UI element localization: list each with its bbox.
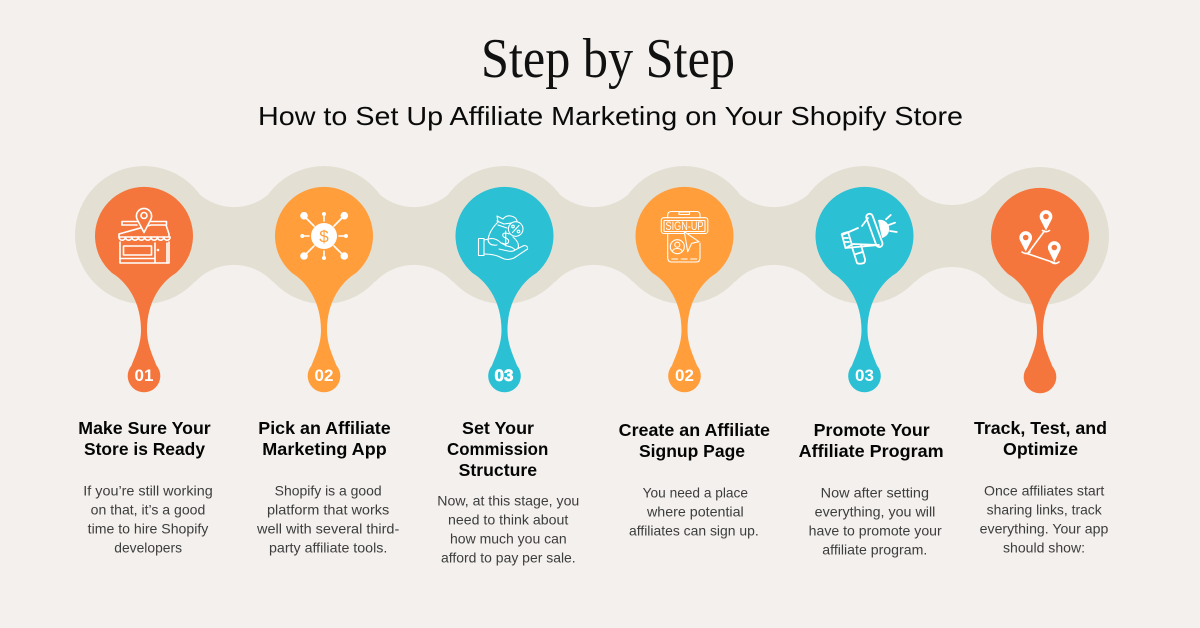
heading <box>258 418 391 459</box>
step 2 <box>256 187 399 556</box>
icon: sign-up phone <box>661 212 708 262</box>
drop marker <box>275 187 373 392</box>
subtitle: How to Set Up Affiliate Marketing on Your Shopify Store <box>258 101 963 131</box>
description: If you’re still working <box>83 484 213 499</box>
step 1 <box>78 187 213 556</box>
heading: Promote Your <box>814 420 930 440</box>
icon: megaphone <box>842 213 897 264</box>
description: Now, at this stage, you <box>437 494 579 509</box>
drop marker <box>816 187 914 392</box>
description: time to hire Shopify <box>88 522 209 537</box>
icon: sign-up phone: SIGN-UP <box>666 221 704 233</box>
icon: dollar network: $ <box>319 227 329 246</box>
description: sharing links, track <box>987 503 1102 518</box>
drop marker <box>456 187 554 392</box>
description: everything. Your app <box>980 522 1108 537</box>
description: affiliates can sign up. <box>629 524 759 539</box>
heading <box>974 418 1107 459</box>
heading <box>447 418 548 480</box>
heading: Store is Ready <box>84 439 205 459</box>
icon: dollar network <box>300 212 348 260</box>
number: 01 <box>135 366 153 385</box>
description <box>629 486 759 539</box>
step 4 <box>619 187 770 539</box>
drop marker <box>636 187 734 392</box>
heading <box>78 418 211 459</box>
description: platform that works <box>267 503 390 518</box>
heading: Pick an Affiliate <box>258 418 391 438</box>
heading: Commission <box>447 439 548 459</box>
beige connecting band <box>75 166 1109 305</box>
icon: storefront with pin <box>119 208 170 263</box>
description: Once affiliates start <box>984 484 1105 499</box>
drop marker <box>95 187 193 392</box>
description <box>980 484 1108 556</box>
icon: hand holding money bag <box>478 216 528 260</box>
description: Shopify is a good <box>275 484 382 499</box>
description: should show: <box>1003 541 1085 556</box>
heading: Set Your <box>462 418 534 438</box>
heading: Create an Affiliate <box>619 420 770 440</box>
heading: Optimize <box>1003 439 1078 459</box>
description: well with several third- <box>256 522 399 537</box>
heading: Make Sure Your <box>78 418 211 438</box>
number: 03 <box>495 366 513 385</box>
description: on that, it’s a good <box>91 503 205 518</box>
description: affiliate program. <box>822 543 927 558</box>
description: developers <box>114 541 182 556</box>
description: You need a place <box>643 486 748 501</box>
description: how much you can <box>450 532 567 547</box>
number: 02 <box>315 366 333 385</box>
number: 02 <box>675 366 694 385</box>
description <box>256 484 399 556</box>
heading <box>619 420 770 461</box>
step 3 <box>437 187 579 566</box>
heading <box>799 420 944 461</box>
heading: Marketing App <box>262 439 387 459</box>
description <box>437 494 579 566</box>
description <box>83 484 213 556</box>
description: party affiliate tools. <box>269 541 387 556</box>
step 6 <box>974 188 1108 556</box>
number: 03 <box>855 366 874 385</box>
heading: Signup Page <box>639 441 745 461</box>
description: where potential <box>646 505 744 520</box>
description: have to promote your <box>809 524 942 539</box>
description: Now after setting <box>821 486 929 501</box>
step 5 <box>799 187 944 558</box>
title: Step by Step <box>481 28 735 90</box>
description: afford to pay per sale. <box>441 551 576 566</box>
drop marker <box>991 188 1089 393</box>
description: everything, you will <box>815 505 935 520</box>
icon: connected map pins <box>1019 210 1061 264</box>
heading: Affiliate Program <box>799 441 944 461</box>
description: need to think about <box>448 513 569 528</box>
heading: Structure <box>459 460 537 480</box>
description <box>809 486 942 558</box>
heading: Track, Test, and <box>974 418 1107 438</box>
